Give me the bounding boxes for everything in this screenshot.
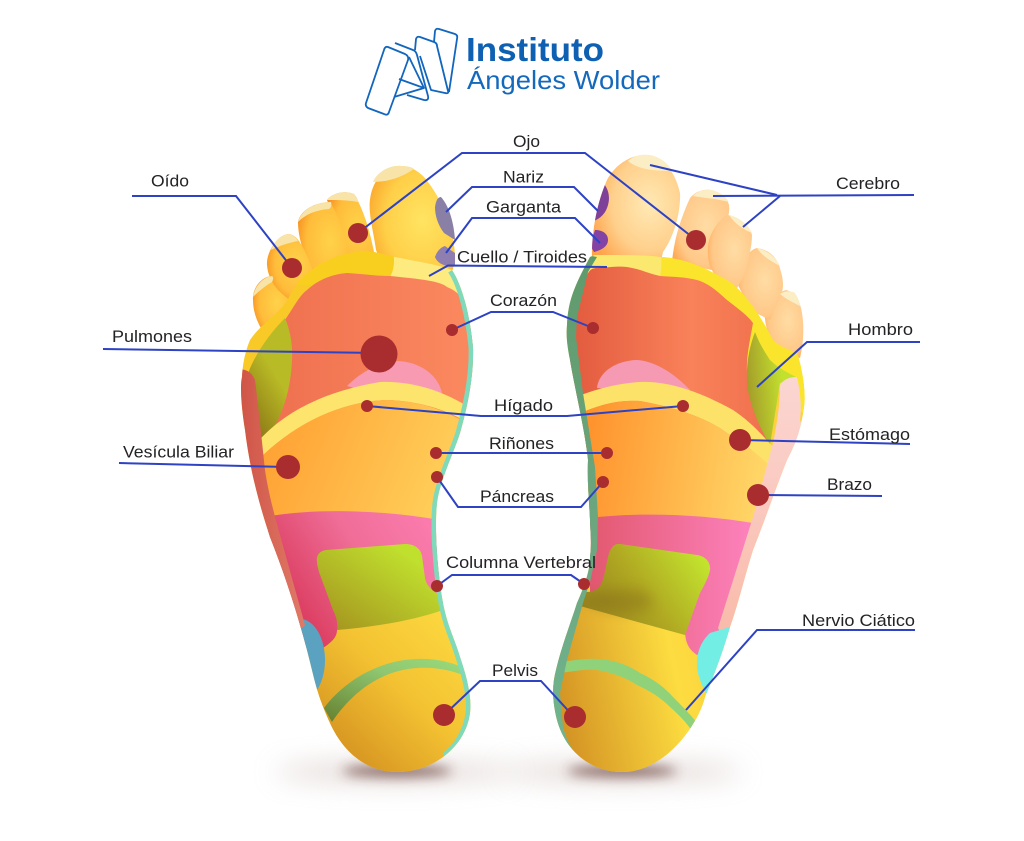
callout: Brazo: Brazo bbox=[827, 476, 872, 494]
logo text: Ángeles Wolder: Ángeles Wolder bbox=[467, 65, 660, 95]
logo text: Instituto: Instituto bbox=[466, 31, 604, 68]
callout: Cuello / Tiroides: Cuello / Tiroides bbox=[457, 248, 587, 266]
top yellow bands bbox=[296, 252, 394, 285]
callout: Páncreas bbox=[431, 471, 609, 507]
midfoot orange bbox=[250, 400, 470, 560]
logo mark bbox=[366, 29, 457, 115]
callout: Vesícula Biliar: Vesícula Biliar bbox=[123, 444, 235, 462]
heel shadows bbox=[275, 762, 742, 782]
callout: Garganta bbox=[446, 198, 600, 253]
heel yellow bbox=[304, 608, 470, 772]
left toes bbox=[253, 166, 455, 335]
callout: Oído: Oído bbox=[151, 172, 189, 190]
left foot bbox=[230, 166, 480, 780]
plantar pink bbox=[590, 515, 753, 660]
yellow arch bbox=[250, 382, 470, 458]
right foot bbox=[540, 155, 815, 780]
cyan sciatic circle bbox=[696, 627, 730, 694]
callout: Nariz bbox=[446, 168, 598, 212]
callout: Ojo bbox=[348, 133, 706, 250]
toe nails bbox=[628, 155, 800, 306]
green arc bbox=[324, 659, 466, 722]
infographic: foot reflexology map bbox=[103, 28, 920, 793]
callout: Hígado: Hígado bbox=[494, 397, 553, 415]
blue sciatic circle bbox=[298, 619, 325, 690]
shoulder green zone bbox=[248, 318, 292, 438]
midfoot orange bbox=[583, 401, 770, 525]
arch green block bbox=[317, 544, 443, 630]
nose and throat purple zones bbox=[435, 197, 455, 266]
callout: Vesícula Biliar bbox=[119, 444, 300, 479]
pink oval bbox=[347, 361, 442, 393]
metatarsal red zone bbox=[274, 273, 474, 440]
callout: Nervio Ciático bbox=[686, 612, 915, 710]
callout: Riñones: Riñones bbox=[489, 435, 554, 453]
callout: Pulmones bbox=[103, 328, 398, 372]
callout: Oído bbox=[132, 172, 302, 278]
callout: Columna Vertebral bbox=[431, 554, 596, 592]
right sole zones bbox=[553, 255, 805, 772]
callout: Corazón bbox=[446, 292, 599, 336]
callout: Hombro bbox=[757, 321, 920, 387]
callout: Hombro: Hombro bbox=[848, 321, 913, 339]
callout: Nervio Ciático: Nervio Ciático bbox=[802, 612, 915, 630]
right toes bbox=[590, 155, 803, 358]
left sole zones bbox=[241, 252, 474, 772]
heel yellow bbox=[553, 602, 726, 772]
callout: Pelvis: Pelvis bbox=[492, 662, 538, 680]
callout: Corazón: Corazón bbox=[490, 292, 557, 310]
callout: Cerebro bbox=[650, 165, 914, 227]
shoulder green zone bbox=[747, 332, 798, 445]
pale outer band bbox=[718, 377, 801, 642]
outer red band bbox=[238, 369, 305, 640]
nose and throat purple zones bbox=[592, 185, 609, 252]
callout: Riñones bbox=[430, 435, 613, 459]
callout: Pulmones: Pulmones bbox=[112, 328, 192, 346]
yellow arch bbox=[578, 382, 772, 466]
plantar pink bbox=[265, 511, 443, 650]
medial green band bbox=[553, 256, 598, 750]
callout: Brazo bbox=[747, 476, 882, 506]
arch green block bbox=[580, 544, 710, 635]
callout: Páncreas: Páncreas bbox=[480, 488, 554, 506]
metatarsal red zone bbox=[570, 267, 772, 450]
callout: Cuello / Tiroides bbox=[429, 248, 607, 276]
callout: Estómago bbox=[729, 426, 910, 451]
callout: Hígado bbox=[361, 397, 689, 416]
callout: Cerebro: Cerebro bbox=[836, 175, 900, 193]
toe nails bbox=[253, 166, 414, 297]
logo: Instituto Ángeles Wolder bbox=[366, 29, 660, 115]
green arc bbox=[560, 659, 697, 731]
callout: Garganta: Garganta bbox=[486, 198, 562, 216]
callout: Estómago: Estómago bbox=[829, 426, 910, 444]
callout: Columna Vertebral: Columna Vertebral bbox=[446, 554, 596, 572]
callout: Ojo: Ojo bbox=[513, 133, 540, 151]
callout: Nariz: Nariz bbox=[503, 168, 544, 186]
callout: Pelvis bbox=[433, 662, 586, 728]
medial teal band bbox=[436, 270, 473, 757]
pink oval bbox=[597, 360, 690, 392]
top yellow bands bbox=[577, 255, 662, 282]
